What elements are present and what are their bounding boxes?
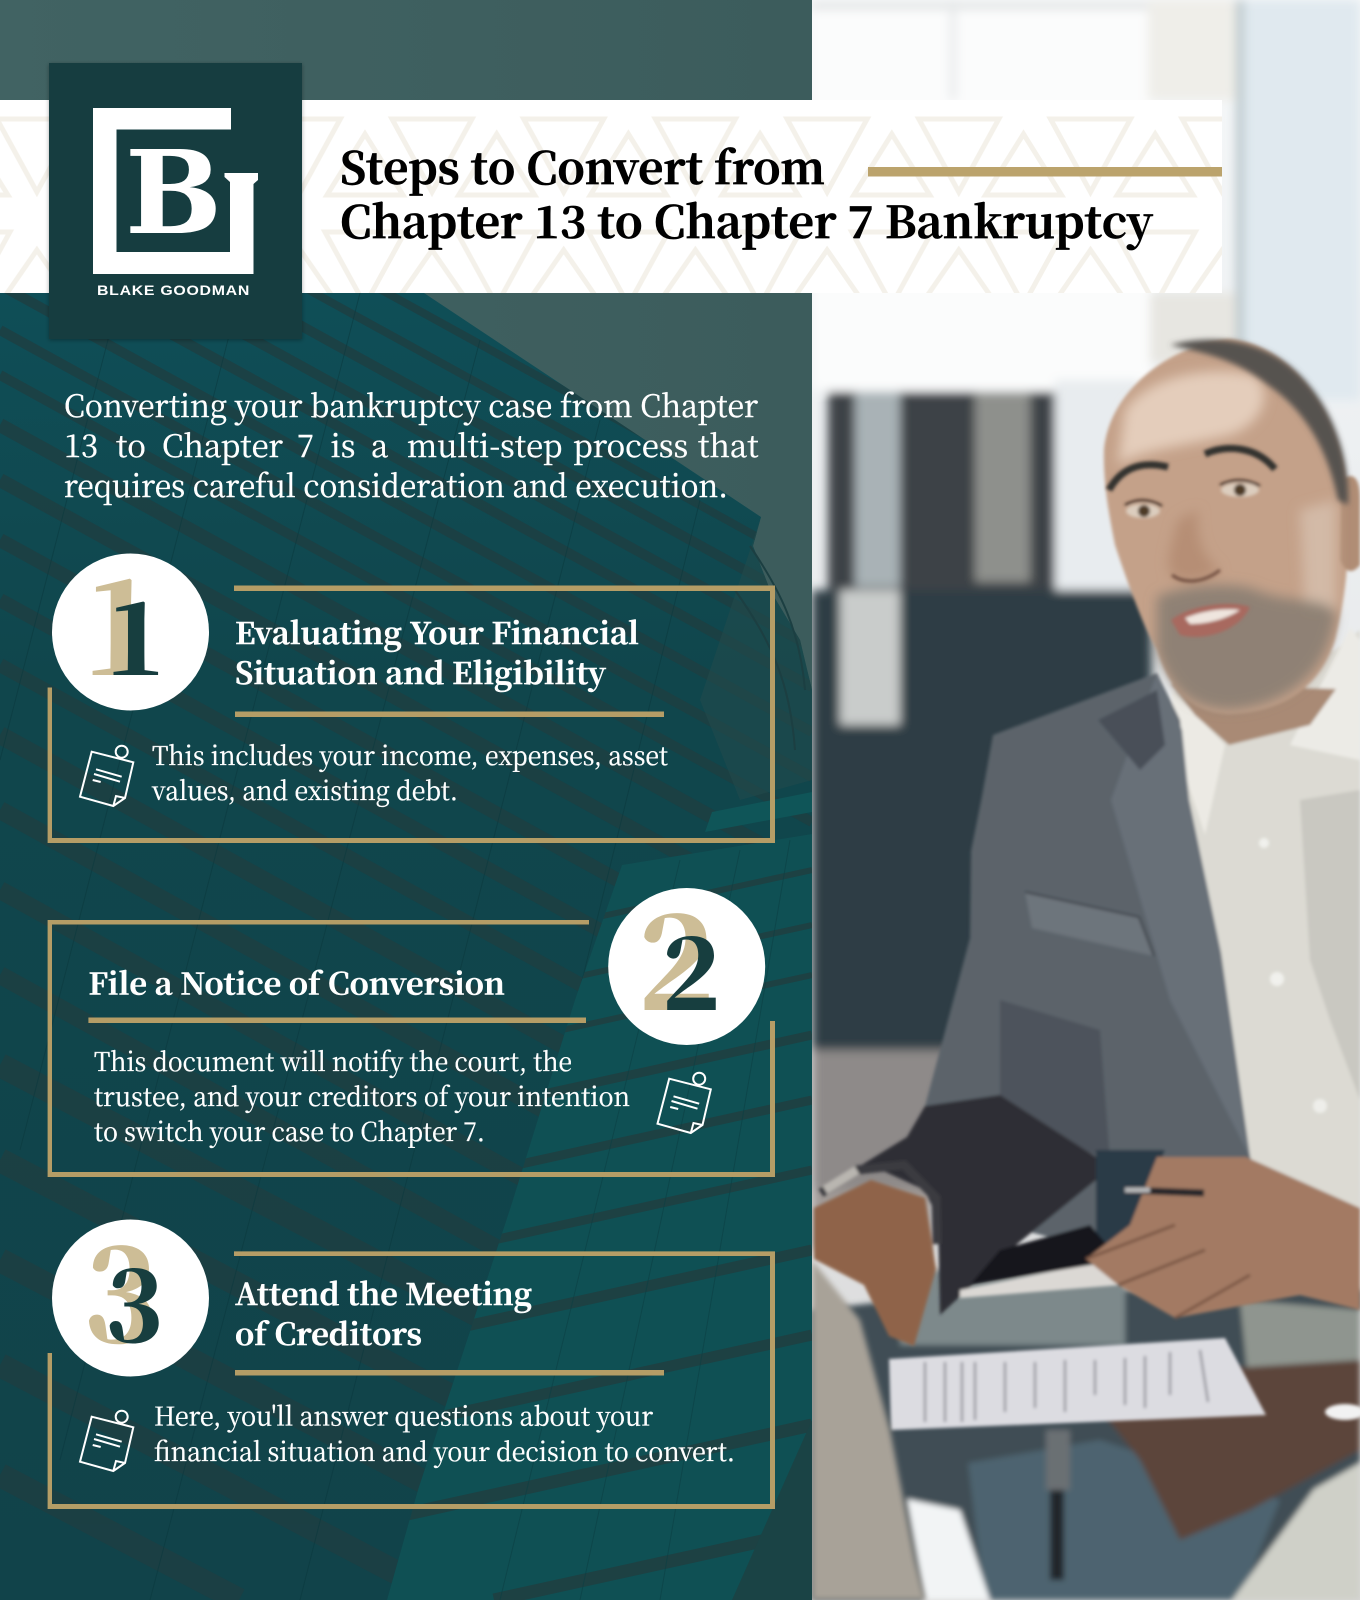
intro paragraph: to (116, 421, 146, 466)
title accent line (868, 167, 1222, 176)
step 2 description (94, 1042, 630, 1149)
step 3 heading: of Creditors (235, 1310, 422, 1354)
face shading (1118, 371, 1336, 710)
step 1 heading (235, 609, 639, 693)
step 2 description: to switch your case to Chapter 7. (94, 1112, 485, 1149)
intro paragraph: is (330, 421, 355, 466)
step 1 frame (48, 586, 775, 843)
logo: B (125, 126, 222, 261)
step 3 heading (235, 1270, 532, 1354)
banner background with triangle pattern (0, 100, 1222, 293)
icon: note with pin (658, 1073, 711, 1133)
step 2 number badge: 2 (662, 894, 720, 1039)
paper (889, 1338, 1266, 1430)
step 1 underline (235, 712, 664, 717)
icon: note with pin (80, 746, 133, 806)
eyebrows (1109, 465, 1168, 490)
step 1 number badge: 1 (105, 559, 166, 704)
intro paragraph (64, 381, 759, 506)
intro paragraph: 13 (64, 421, 98, 466)
intro paragraph: process (573, 421, 688, 466)
panel: left teal background with building (0, 0, 812, 1600)
step 1 number badge: 1 (82, 523, 158, 713)
panel: step 3 (48, 1190, 775, 1509)
intro paragraph: requires careful consideration and execution. (64, 461, 728, 506)
right hand (1086, 1157, 1360, 1318)
panel: step 2 (48, 858, 775, 1177)
intro paragraph: Converting your bankruptcy case from Chapter (64, 381, 759, 426)
panel: step 1 (48, 523, 775, 843)
title: Steps to Convert from (340, 133, 825, 197)
foreground blur (812, 1260, 925, 1600)
step 1 number badge (52, 523, 209, 713)
step 1 heading: Situation and Eligibility (235, 649, 607, 693)
logo (49, 63, 302, 339)
step 3 number badge: 3 (83, 1190, 157, 1380)
logo: BLAKE GOODMAN (97, 283, 250, 298)
step 1 description: This includes your income, expenses, asset (152, 736, 668, 773)
step 2 frame (48, 920, 775, 1177)
step 3 underline (235, 1370, 664, 1376)
folder under sleeve (960, 1262, 1120, 1298)
intro paragraph: a (371, 421, 388, 466)
step 1 description (151, 736, 668, 808)
title (340, 133, 1153, 251)
step 2 description: trustee, and your creditors of your intention (94, 1077, 630, 1114)
step 3 number badge (52, 1190, 209, 1380)
suit jacket (925, 673, 1260, 1244)
step 2 number badge (608, 858, 765, 1048)
step 3 description: financial situation and your decision to convert. (154, 1432, 735, 1469)
step 3 frame (48, 1251, 775, 1509)
intro paragraph: that (698, 421, 759, 466)
eyes (1126, 504, 1160, 518)
left hand (814, 1180, 936, 1346)
step 3 number badge: 3 (105, 1226, 163, 1371)
step 3 description: Here, you'll answer questions about your (154, 1396, 653, 1434)
step 2 description: This document will notify the court, the (94, 1042, 572, 1079)
dark sleeve (1096, 1150, 1165, 1255)
icon: note with pin (80, 1411, 133, 1471)
step 2 underline (88, 1018, 586, 1023)
step 3 description (154, 1396, 735, 1469)
step 1 description: values, and existing debt. (151, 771, 458, 808)
intro paragraph: Chapter (162, 421, 284, 466)
watch (821, 1165, 937, 1244)
intro paragraph: multi-step (407, 421, 563, 466)
photo: businessman at a glass table (812, 0, 1360, 1600)
step 2 number badge: 2 (637, 858, 715, 1048)
neck (1171, 684, 1336, 745)
intro paragraph: 7 (297, 421, 314, 466)
step 2 heading: File a Notice of Conversion (88, 960, 505, 1004)
mouth (1171, 604, 1250, 637)
shirt (1175, 630, 1360, 1215)
step 1 heading: Evaluating Your Financial (235, 609, 639, 653)
step 3 heading: Attend the Meeting (235, 1270, 532, 1314)
title: Chapter 13 to Chapter 7 Bankruptcy (340, 187, 1153, 251)
head (1104, 339, 1348, 714)
